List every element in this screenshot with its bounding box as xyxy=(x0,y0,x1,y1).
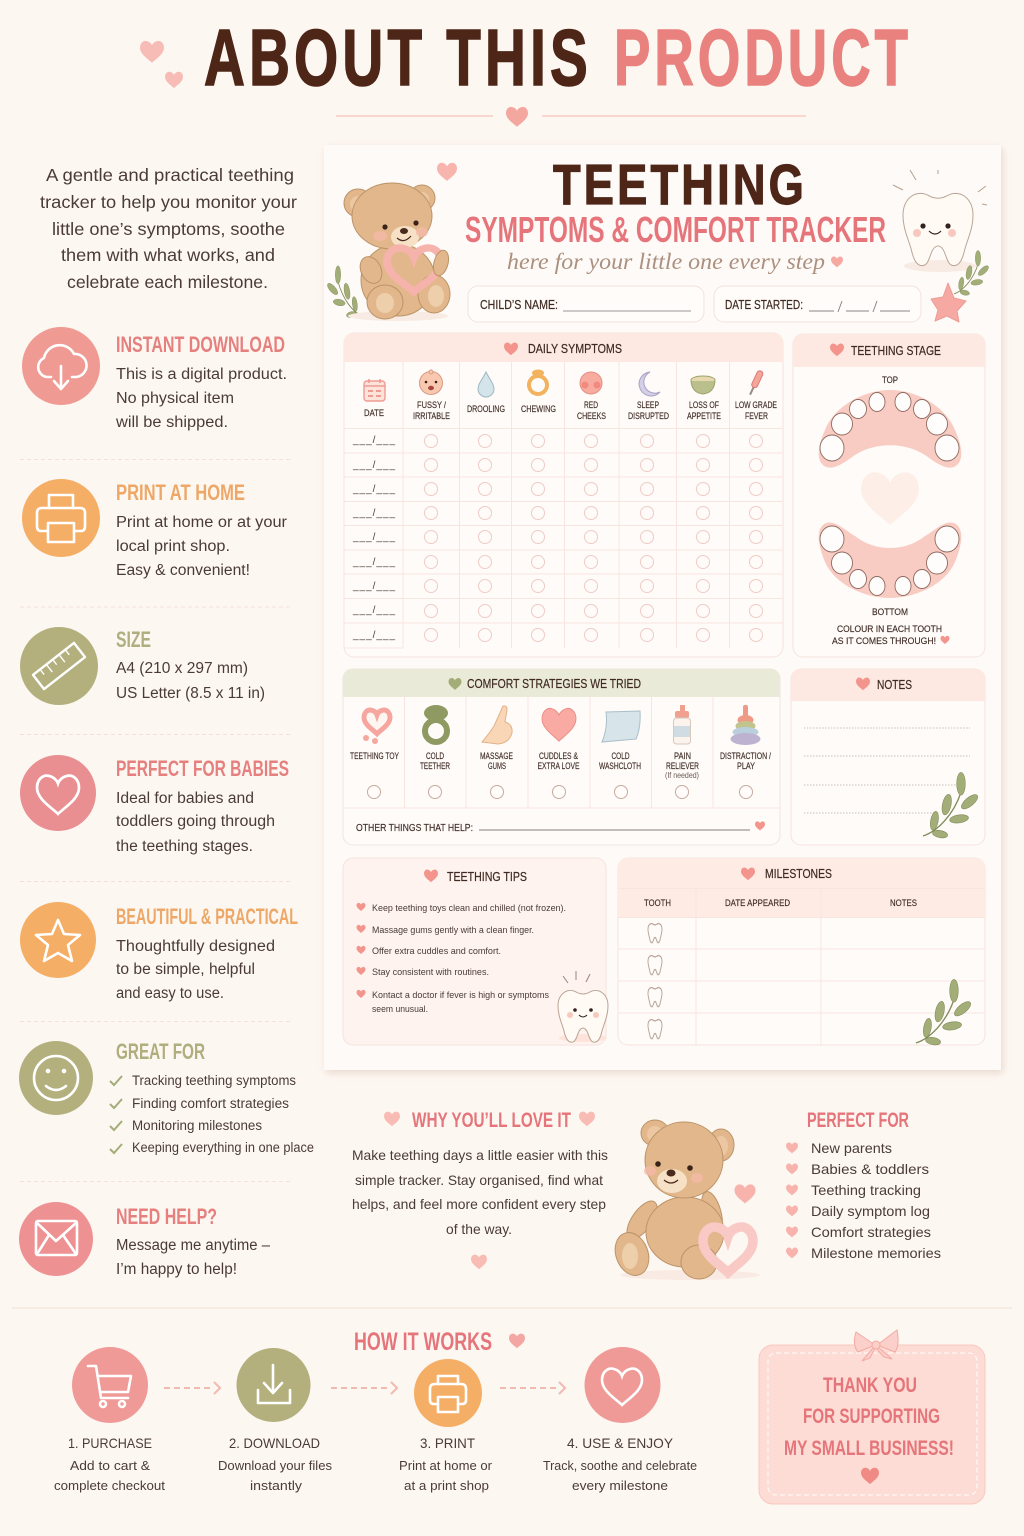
tips list xyxy=(356,903,566,1015)
strategy checkboxes xyxy=(368,786,752,798)
strategy labels: CUDDLES & xyxy=(539,751,578,761)
symptom column headings: SLEEP xyxy=(637,400,659,410)
icon: happy tooth xyxy=(893,170,987,272)
panel: notes xyxy=(791,669,985,845)
check list: Monitoring milestones xyxy=(132,1118,262,1133)
intro paragraph: them with what works, and xyxy=(61,245,275,265)
icon: thermometer xyxy=(747,370,764,396)
feature: perfect for babies: the teething stages. xyxy=(116,838,253,855)
feature: perfect for babies: PERFECT FOR BABIES xyxy=(116,756,289,781)
check list xyxy=(110,1073,314,1155)
panel: comfort strategies: COMFORT STRATEGIES WE TRIED xyxy=(467,677,641,691)
symptom column headings: LOSS OF xyxy=(689,400,719,410)
feature: print at home: PRINT AT HOME xyxy=(116,480,245,505)
feature: need help xyxy=(19,1202,270,1278)
date rows: ___/___ xyxy=(352,581,395,592)
symptom column headings: FUSSY / xyxy=(417,400,446,410)
feature: instant download: will be shipped. xyxy=(115,414,228,431)
icon: pain reliever bottle xyxy=(674,705,690,744)
icon: cloud download xyxy=(38,345,87,389)
feature: size: SIZE xyxy=(116,627,151,652)
feature: perfect for babies: Ideal for babies and xyxy=(116,790,254,807)
icon: red cheeks xyxy=(580,372,602,394)
step 2: download: instantly xyxy=(250,1478,303,1493)
thank you card xyxy=(759,1330,985,1504)
icon: chewing ring xyxy=(529,370,547,394)
symptom column headings: IRRITABLE xyxy=(413,411,450,421)
icon: drool drop xyxy=(478,372,494,397)
field: child's name xyxy=(468,286,704,322)
tips list: Offer extra cuddles and comfort. xyxy=(372,946,501,957)
feature: size: US Letter (8.5 x 11 in) xyxy=(116,685,265,702)
icon: calendar xyxy=(364,379,385,401)
section: perfect for list: Daily symptom log xyxy=(811,1203,930,1219)
feature: beautiful and practical xyxy=(20,902,298,1002)
section: perfect for list: Comfort strategies xyxy=(811,1224,931,1240)
step 3: print: Print at home or xyxy=(399,1458,493,1473)
feature: size: A4 (210 x 297 mm) xyxy=(116,660,248,677)
symptom column headings: DATE xyxy=(364,408,384,418)
strategy labels: WASHCLOTH xyxy=(599,761,641,771)
step 2: download xyxy=(218,1348,332,1493)
tips list: Kontact a doctor if fever is high or symptoms xyxy=(372,990,549,1001)
tracker header xyxy=(326,153,990,322)
center heart xyxy=(861,472,919,525)
section: why you'll love it: helps, and feel more confident every step xyxy=(352,1196,606,1212)
field: date started: DATE STARTED: xyxy=(725,298,803,312)
strategy labels: PLAY xyxy=(737,761,755,771)
tips list: Keep teething toys clean and chilled (not frozen). xyxy=(372,903,566,914)
arrow xyxy=(164,1382,220,1394)
strategy labels: TEETHING TOY xyxy=(350,751,399,761)
panel: teething stage: TOP xyxy=(882,375,898,385)
panel: milestones: MILESTONES xyxy=(765,867,832,881)
feature: beautiful and practical: and easy to use. xyxy=(116,985,224,1002)
icon: small tooth xyxy=(558,971,608,1042)
feature: print at home: Print at home or at your xyxy=(116,514,287,531)
top gum and teeth xyxy=(819,390,961,468)
icon: bow xyxy=(854,1330,898,1361)
panel: teething stage xyxy=(793,334,985,657)
tracker header: here for your little one every step xyxy=(507,249,825,274)
panel: comfort strategies: OTHER THINGS THAT HELP: xyxy=(356,822,473,834)
date rows: ___/___ xyxy=(352,557,395,568)
step 4: use and enjoy: every milestone xyxy=(572,1478,668,1493)
panel: milestones xyxy=(618,858,985,1046)
panel: notes: NOTES xyxy=(877,678,912,692)
feature: print at home: local print shop. xyxy=(116,538,230,555)
step 3: print xyxy=(399,1359,493,1493)
check list: Finding comfort strategies xyxy=(132,1096,289,1111)
icon: massage finger xyxy=(482,706,512,744)
icon: star xyxy=(931,283,966,322)
section: why you'll love it: WHY YOU’LL LOVE IT xyxy=(412,1109,571,1132)
strategy labels: COLD xyxy=(426,751,444,761)
date rows: ___/___ xyxy=(352,532,395,543)
step 4: use and enjoy: 4. USE & ENJOY xyxy=(567,1435,674,1451)
section: perfect for list: PERFECT FOR xyxy=(807,1109,909,1132)
date rows: ___/___ xyxy=(352,484,395,495)
symptom column headings xyxy=(364,400,777,421)
date rows: ___/___ xyxy=(352,630,395,641)
field: child's name: CHILD’S NAME: xyxy=(480,298,558,312)
panel: teething tips xyxy=(343,858,608,1045)
strategy labels: RELIEVER xyxy=(666,761,699,771)
feature: need help: Message me anytime – xyxy=(116,1237,270,1254)
thank you card: FOR SUPPORTING xyxy=(803,1405,940,1428)
step 3: print: 3. PRINT xyxy=(420,1435,475,1451)
section: perfect for list: Teething tracking xyxy=(811,1182,921,1198)
date rows: ___/___ xyxy=(352,508,395,519)
strategy labels: EXTRA LOVE xyxy=(538,761,580,771)
strategy labels xyxy=(350,751,771,780)
feature: instant download xyxy=(22,327,287,431)
icon: smiley xyxy=(34,1056,78,1100)
strategy labels: PAIN xyxy=(674,751,691,761)
strategy labels: GUMS xyxy=(488,761,506,771)
tips list: Stay consistent with routines. xyxy=(372,967,489,978)
symptom column headings: DROOLING xyxy=(467,404,505,414)
panel: daily symptoms: DAILY SYMPTOMS xyxy=(528,342,622,356)
strategy labels: TEETHER xyxy=(420,761,450,771)
icon: washcloth xyxy=(602,711,640,742)
date rows: ___/___ xyxy=(352,460,395,471)
bottom gum and teeth xyxy=(819,522,961,598)
step 3: print: at a print shop xyxy=(404,1478,489,1493)
section: perfect for list: Babies & toddlers xyxy=(811,1161,929,1177)
symptom column headings: FEVER xyxy=(745,411,768,421)
feature: need help: NEED HELP? xyxy=(116,1204,217,1229)
section: why you'll love it: simple tracker. Stay organised, find what xyxy=(355,1172,603,1188)
intro paragraph xyxy=(40,165,297,292)
feature: print at home: Easy & convenient! xyxy=(116,562,250,579)
strategy labels: COLD xyxy=(612,751,630,761)
feature: instant download: This is a digital product. xyxy=(116,366,287,383)
feature: great for: GREAT FOR xyxy=(116,1039,205,1064)
intro paragraph: tracker to help you monitor your xyxy=(40,192,297,212)
panel: daily symptoms xyxy=(344,333,783,657)
icon: fussy baby xyxy=(420,370,442,394)
symptom column headings: RED xyxy=(584,400,598,410)
feature: instant download: No physical item xyxy=(116,390,234,407)
symptom column headings: CHEWING xyxy=(521,404,556,414)
step 2: download: Download your files xyxy=(218,1458,332,1473)
icon: ruler xyxy=(33,643,85,689)
panel: milestones: TOOTH xyxy=(644,898,671,908)
feature: perfect for babies: toddlers going through xyxy=(116,813,275,830)
panel: teething stage: TEETHING STAGE xyxy=(851,344,941,358)
icon: teething toy xyxy=(363,710,390,744)
step 2: download: 2. DOWNLOAD xyxy=(229,1435,320,1451)
feature: beautiful and practical: Thoughtfully designed xyxy=(116,938,275,955)
icon: heart xyxy=(37,776,79,814)
panel: teething stage: COLOUR IN EACH TOOTH xyxy=(837,624,942,634)
step 1: purchase: Add to cart & xyxy=(70,1458,150,1473)
thank you card: MY SMALL BUSINESS! xyxy=(784,1437,954,1460)
section: why you'll love it: Make teething days a little easier with this xyxy=(352,1147,608,1163)
panel: teething stage: BOTTOM xyxy=(872,607,908,617)
panel: comfort strategies xyxy=(343,669,780,845)
feature: size xyxy=(20,627,265,705)
field: date started xyxy=(714,286,921,322)
strategy labels: (If needed) xyxy=(665,771,699,780)
step 1: purchase: 1. PURCHASE xyxy=(68,1435,152,1451)
tracker header: TEETHING xyxy=(553,153,807,217)
step 1: purchase xyxy=(54,1347,165,1493)
icon: envelope xyxy=(36,1221,77,1255)
icon: bear holding heart xyxy=(326,163,457,321)
strategy labels: MASSAGE xyxy=(480,751,513,761)
check list: Keeping everything in one place xyxy=(132,1140,314,1155)
date rows: ___/___ xyxy=(352,605,395,616)
section: why you'll love it xyxy=(352,1109,608,1269)
date rows xyxy=(352,435,395,641)
intro paragraph: celebrate each milestone. xyxy=(67,272,268,292)
panel: teething stage: AS IT COMES THROUGH! xyxy=(832,636,936,646)
section: perfect for list xyxy=(786,1109,941,1261)
thank you card: THANK YOU xyxy=(823,1374,917,1397)
feature: beautiful and practical: BEAUTIFUL & PRACTICAL xyxy=(116,904,298,929)
panel: tracker sheet xyxy=(324,145,1003,1073)
section: how it works: HOW IT WORKS xyxy=(354,1328,492,1356)
feature: beautiful and practical: to be simple, helpful xyxy=(116,961,255,978)
milestone tooth icons xyxy=(648,924,662,1039)
icon: cold teether xyxy=(424,705,448,742)
section: why you'll love it: of the way. xyxy=(446,1221,512,1237)
intro paragraph: little one’s symptoms, soothe xyxy=(52,219,285,239)
feature: perfect for babies xyxy=(20,755,289,855)
step 1: purchase: complete checkout xyxy=(54,1478,165,1493)
symptom column headings: CHEEKS xyxy=(577,411,606,421)
strategy labels: DISTRACTION / xyxy=(720,751,771,761)
step 4: use and enjoy: Track, soothe and celebrate xyxy=(543,1458,697,1473)
main title xyxy=(140,13,912,127)
icon: stacking toy xyxy=(730,705,760,745)
arrow xyxy=(500,1382,565,1394)
icon: star xyxy=(36,920,80,961)
icon: moon xyxy=(639,372,660,396)
panel: milestones: DATE APPEARED xyxy=(725,898,790,908)
panel: milestones: NOTES xyxy=(890,898,917,908)
tips list: Massage gums gently with a clean finger. xyxy=(372,925,534,936)
step 4: use and enjoy xyxy=(543,1347,697,1493)
icon: cuddles heart xyxy=(542,708,576,741)
arrow xyxy=(331,1382,397,1394)
section: how it works xyxy=(54,1328,697,1493)
feature: need help: I’m happy to help! xyxy=(116,1261,237,1278)
symptom column headings: DISRUPTED xyxy=(628,411,669,421)
icon: bowl xyxy=(691,376,715,394)
symptom column headings: LOW GRADE xyxy=(735,400,777,410)
symptom column headings: APPETITE xyxy=(687,411,721,421)
date rows: ___/___ xyxy=(352,435,395,446)
check list: Tracking teething symptoms xyxy=(132,1073,296,1088)
section: perfect for list: Milestone memories xyxy=(811,1245,941,1261)
panel: teething tips: TEETHING TIPS xyxy=(447,870,527,884)
intro paragraph: A gentle and practical teething xyxy=(46,165,294,185)
feature: great for xyxy=(19,1039,314,1155)
icon: printer xyxy=(37,495,85,542)
feature: print at home xyxy=(22,479,287,579)
tips list: seem unusual. xyxy=(372,1004,428,1015)
checkbox circles xyxy=(424,434,762,642)
section: perfect for list: New parents xyxy=(811,1140,892,1156)
illustration: teddy bear with heart ring xyxy=(609,1120,760,1280)
feature: instant download: INSTANT DOWNLOAD xyxy=(116,332,285,357)
main title: ABOUT THIS xyxy=(204,13,592,102)
